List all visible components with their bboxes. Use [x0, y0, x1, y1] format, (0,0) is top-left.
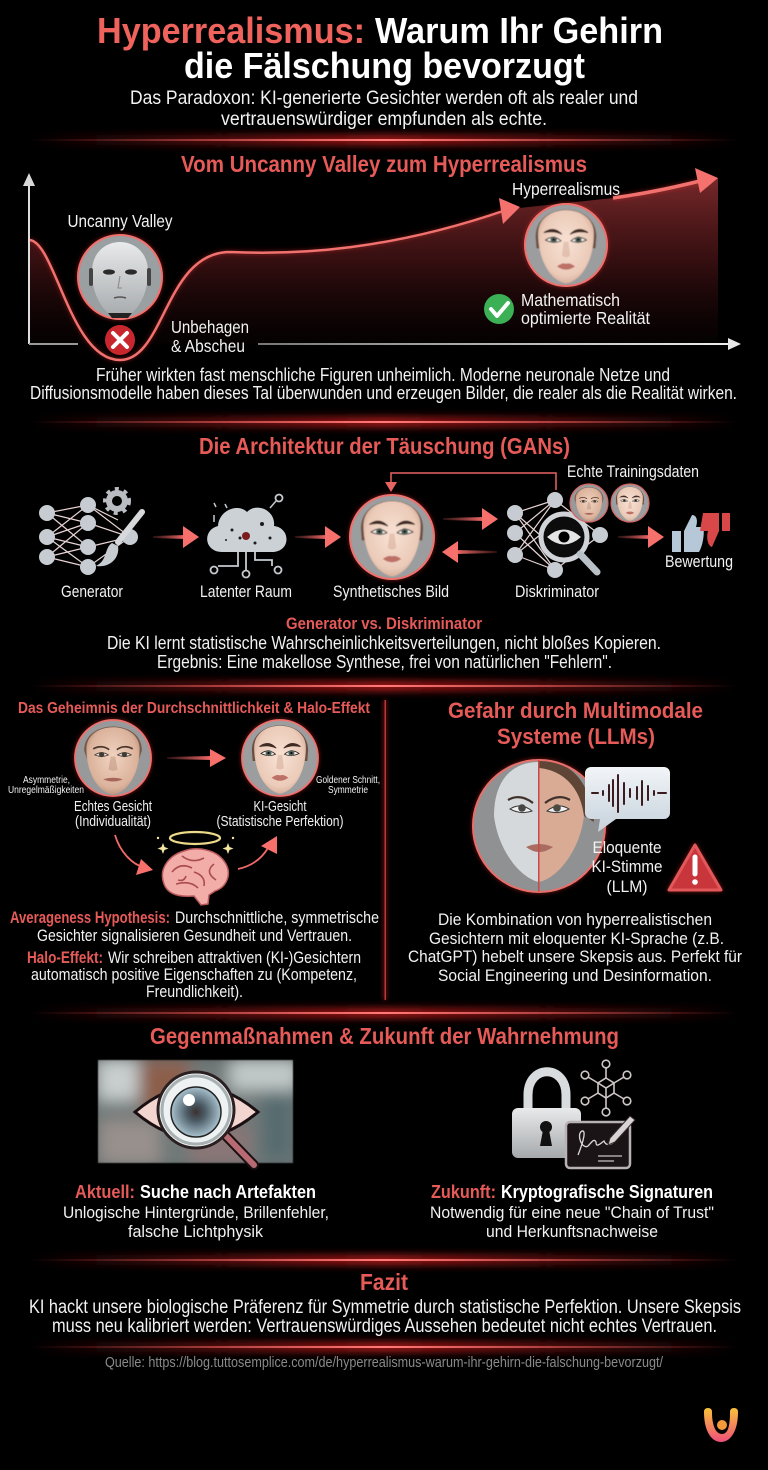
note: goldener schnitt: Goldener Schnitt,: [316, 775, 380, 786]
arrow: discriminator to synthetic: [442, 541, 497, 563]
panel: GAN architecture: [39, 433, 733, 672]
label: KI gesicht: (Statistische Perfektion): [216, 813, 344, 830]
text: halo effect: Freundlichkeit).: [146, 983, 243, 1001]
icon: crypto network: [581, 1060, 631, 1116]
icon: eye under magnifier: [135, 1072, 258, 1165]
heading: fazit: Fazit: [360, 1269, 408, 1295]
label: generator: Generator: [61, 583, 123, 601]
text: averageness hypothesis: [10, 909, 379, 945]
vertical divider: [382, 700, 388, 1000]
arrow: discriminator to rating: [618, 526, 664, 548]
icon: generator network: [39, 489, 142, 575]
text: halo effect: [27, 949, 361, 1001]
title: Warum Ihr Gehirn: [375, 10, 663, 51]
text: generator vs discriminator: [107, 614, 661, 672]
label: echtes gesicht: Echtes Gesicht: [74, 798, 153, 815]
text: zukunft: Kryptografische Signaturen: [501, 1182, 713, 1202]
heading: LLMs: Systeme (LLMs): [497, 724, 655, 749]
label: hyperrealismus: Hyperrealismus: [512, 179, 620, 199]
images: training faces: [570, 484, 649, 522]
title: die Fälschung bevorzugt: [184, 45, 585, 86]
icon: thumbs: [672, 513, 730, 552]
label: eloquente KI-stimme: (LLM): [606, 878, 648, 896]
panel: averageness and halo effect: [8, 700, 380, 1001]
label: KI gesicht: KI-Gesicht: [254, 798, 307, 815]
arrow: real face to brain: [115, 835, 153, 875]
icon: latent cloud: [207, 494, 287, 578]
label: synthetisches bild: Synthetisches Bild: [333, 583, 449, 601]
label: mathematisch optimierte realitaet: Mathematisch: [521, 290, 620, 310]
image: synthetic face: [350, 495, 434, 579]
icon: green check: [484, 294, 514, 324]
text: halo effect: Halo-Effekt:: [27, 949, 103, 967]
label: echtes gesicht: (Individualität): [75, 813, 151, 830]
icon: lock and signature: [512, 1072, 635, 1168]
text: averageness hypothesis: Gesichter signalisieren Gesundheit und Vertrauen.: [37, 927, 352, 945]
text: multimodal explanation: Social Engineering und Desinformation.: [438, 966, 712, 985]
label: eloquente KI-stimme: Eloquente: [592, 839, 662, 857]
text: multimodal explanation: ChatGPT) hebelt unsere Skepsis aus. Perfekt für: [408, 947, 742, 966]
heading: GANs: Die Architektur der Täuschung (GANs): [199, 433, 570, 459]
label: eloquente KI-stimme: KI-Stimme: [592, 858, 662, 876]
text: aktuell: Aktuell:: [75, 1182, 135, 1202]
icon: red cross: [105, 325, 135, 355]
subtitle: Das Paradoxon: KI-generierte Gesichter werden oft als realer und: [130, 87, 638, 109]
panel: countermeasures: [63, 1023, 714, 1241]
title: [97, 10, 663, 86]
text: multimodal explanation: Die Kombination von hyperrealistischen: [438, 910, 712, 929]
text: zukunft: Notwendig für eine neue "Chain of Trust": [430, 1203, 714, 1222]
icon: halo brain: [157, 832, 234, 905]
source: Quelle: https://blog.tuttosemplice.com/de/hyperrealismus-warum-ihr-gehirn-die-falschung-bevorzugt/: [105, 1355, 664, 1371]
label: unbehagen: Unbehagen: [171, 317, 249, 337]
text: zukunft: Zukunft:: [431, 1182, 496, 1202]
arrow: real to AI: [167, 749, 226, 767]
label: latenter raum: Latenter Raum: [200, 583, 292, 601]
icon: discriminator: [507, 492, 608, 578]
text: aktuell: Suche nach Artefakten: [140, 1182, 316, 1202]
heading: averageness: Das Geheimnis der Durchschnittlichkeit & Halo-Effekt: [18, 700, 371, 717]
arrow: synthetic to discriminator: [443, 508, 498, 530]
image: AI face: [242, 720, 318, 796]
feedback line: [385, 473, 556, 492]
label: uncanny valley: Uncanny Valley: [68, 211, 173, 231]
text: uncanny valley explanation: Früher wirkten fast menschliche Figuren unheimlich. Moderne neuronale Netze und: [96, 365, 670, 385]
image: hyperreal face: [525, 204, 607, 286]
icon: logo: [704, 1408, 738, 1442]
note: asymmetrie: Unregelmäßigkeiten: [8, 785, 84, 796]
label: diskriminator: Diskriminator: [515, 583, 599, 601]
label: mathematisch optimierte realitaet: optimierte Realität: [521, 308, 650, 328]
heading: gegenmassnahmen: Gegenmaßnahmen & Zukunft der Wahrnehmung: [150, 1023, 619, 1049]
panel: uncanny valley: [23, 151, 741, 403]
icon: speech bubble waveform: [585, 767, 670, 832]
heading: LLMs: [448, 698, 703, 749]
text: generator vs discriminator: Ergebnis: Eine makellose Synthese, frei von natürlichen "Fehlern".: [157, 652, 612, 672]
subtitle: vertrauenswürdiger empfunden als echte.: [221, 108, 547, 130]
text: halo effect: Wir schreiben attraktiven (KI-)Gesichtern: [108, 949, 361, 967]
text: averageness hypothesis: Averageness Hypothesis:: [10, 909, 170, 927]
subtitle: [130, 87, 638, 130]
heading: LLMs: Gefahr durch Multimodale: [448, 698, 703, 723]
text: multimodal explanation: Gesichtern mit eloquenter KI-Sprache (z.B.: [429, 929, 724, 948]
note: asymmetrie: Asymmetrie,: [23, 775, 70, 786]
arrow: latent to synthetic: [295, 526, 341, 548]
title: Hyperrealismus:: [97, 10, 365, 51]
image: blurred background photo: [97, 1059, 294, 1164]
image: split face: [473, 760, 605, 892]
text: zukunft: [430, 1182, 714, 1241]
text: generator vs discriminator: Generator vs. Diskriminator: [286, 614, 482, 633]
text: halo effect: automatisch positive Eigenschaften zu (Kompetenz,: [31, 966, 357, 984]
label: unbehagen: & Abscheu: [171, 336, 245, 356]
chart: realism curve: [23, 168, 741, 360]
heading: uncanny valley: Vom Uncanny Valley zum Hyperrealismus: [181, 151, 587, 177]
arrow: brain to AI face: [238, 836, 277, 869]
arrow: generator to latent: [153, 526, 199, 548]
label: bewertung: Bewertung: [665, 553, 733, 571]
image: robot face: [78, 235, 162, 319]
text: aktuell: [63, 1182, 329, 1241]
note: goldener schnitt: Symmetrie: [328, 785, 368, 796]
text: aktuell: falsche Lichtphysik: [128, 1222, 263, 1241]
image: real face: [75, 720, 151, 796]
text: averageness hypothesis: Durchschnittliche, symmetrische: [175, 909, 379, 927]
text: zukunft: und Herkunftsnachweise: [486, 1222, 658, 1241]
panel: conclusion: [29, 1269, 741, 1337]
label: echte trainingsdaten: Echte Trainingsdaten: [567, 463, 699, 481]
text: aktuell: Unlogische Hintergründe, Brillenfehler,: [63, 1203, 329, 1222]
panel: multimodal systems: [408, 698, 742, 985]
text: generator vs discriminator: Die KI lernt statistische Wahrscheinlichkeitsverteilungen, nicht bloßes Kopieren.: [107, 633, 661, 653]
icon: warning triangle: [669, 845, 721, 890]
